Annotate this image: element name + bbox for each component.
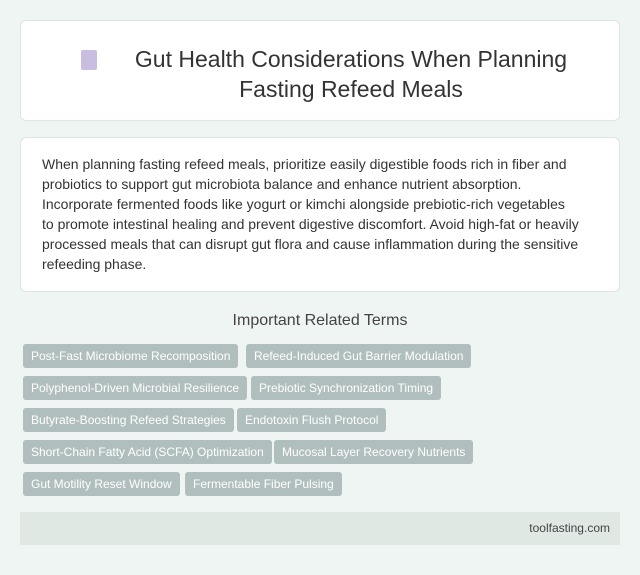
footer: [20, 512, 620, 545]
tags: Endotoxin Flush Protocol: [245, 413, 378, 427]
description text: Incorporate fermented foods like yogurt or kimchi alongside prebiotic-rich vegetables: [42, 196, 565, 212]
description text: probiotics to support gut microbiota balance and enhance nutrient absorption.: [42, 176, 521, 192]
icon: document: [81, 50, 97, 70]
tags: Butyrate-Boosting Refeed Strategies: [31, 413, 226, 427]
footer text: toolfasting.com: [529, 521, 610, 535]
description text: [42, 156, 579, 272]
section heading: Important Related Terms: [233, 312, 407, 329]
tags: Short-Chain Fatty Acid (SCFA) Optimization: [31, 445, 264, 459]
tags: Prebiotic Synchronization Timing: [259, 381, 433, 395]
tags: Gut Motility Reset Window: [31, 477, 172, 491]
description text: processed meals that can disrupt gut flora and cause inflammation during the sensitive: [42, 236, 578, 252]
tags: Fermentable Fiber Pulsing: [193, 477, 334, 491]
tags: Polyphenol-Driven Microbial Resilience: [31, 381, 239, 395]
description card: [20, 137, 620, 292]
tags: Refeed-Induced Gut Barrier Modulation: [254, 349, 463, 363]
description text: to promote intestinal healing and prevent digestive discomfort. Avoid high-fat or heavily: [42, 216, 579, 232]
title card: [20, 20, 620, 121]
tags: Mucosal Layer Recovery Nutrients: [282, 445, 465, 459]
description text: When planning fasting refeed meals, prioritize easily digestible foods rich in fiber and: [42, 156, 567, 172]
title: Gut Health Considerations When Planning Fasting Refeed Meals: [135, 46, 567, 102]
description text: refeeding phase.: [42, 256, 146, 272]
tags: Post-Fast Microbiome Recomposition: [31, 349, 230, 363]
